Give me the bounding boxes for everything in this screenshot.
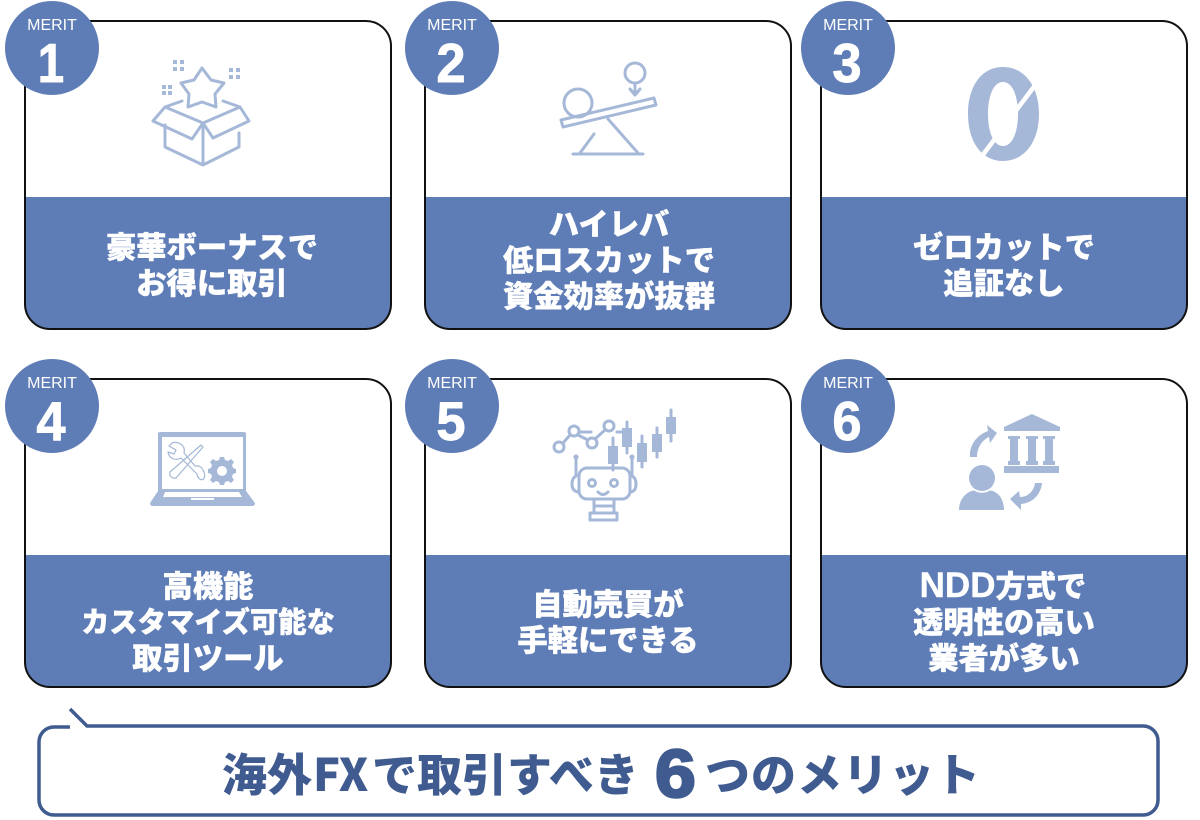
text: merit 2 caption: ハイレバ xyxy=(549,200,669,244)
badge: merit 6: 6 xyxy=(832,391,862,452)
text: merit 4 caption: カスタマイズ可能な xyxy=(81,600,335,641)
title: で取引すべき xyxy=(372,739,639,804)
text: merit 2 caption: 資金効率が抜群 xyxy=(503,272,715,316)
badge: merit 2 xyxy=(405,1,499,95)
callout: title speech box xyxy=(39,709,1158,815)
panel: merit 3 xyxy=(801,1,1187,329)
text: merit 3 caption xyxy=(913,223,1095,303)
text: merit 6 caption: 透明性の高い xyxy=(913,598,1095,642)
panel: merit 1 xyxy=(5,1,391,329)
title xyxy=(222,736,981,811)
badge: merit 4: MERIT xyxy=(27,375,77,392)
text: merit 1 caption: 豪華ボーナスで xyxy=(106,223,318,267)
panel: merit 5 xyxy=(405,359,791,687)
text: merit 4 caption: 取引ツール xyxy=(132,634,284,678)
panel: merit 4 xyxy=(5,359,391,687)
icon: zero xyxy=(968,67,1039,161)
badge: merit 4: 4 xyxy=(36,391,66,452)
badge: merit 3 xyxy=(801,1,895,95)
panel: merit 2 xyxy=(405,1,791,329)
panel: merit 6 xyxy=(801,359,1187,687)
badge: merit 3: 3 xyxy=(832,33,862,94)
badge: merit 5 xyxy=(405,359,499,453)
text: merit 4 caption: 高機能 xyxy=(163,562,253,606)
text: merit 5 caption xyxy=(517,580,699,660)
badge: merit 1 xyxy=(5,1,99,95)
title: 6 xyxy=(655,736,696,811)
badge: merit 6 xyxy=(801,359,895,453)
badge: merit 6: MERIT xyxy=(823,375,873,392)
text: merit 4 caption xyxy=(81,562,335,678)
icon: robot with candlestick chart xyxy=(554,410,676,520)
text: merit 1 caption: お得に取引 xyxy=(136,259,288,303)
badge: merit 4 xyxy=(5,359,99,453)
text: merit 1 caption xyxy=(106,223,318,303)
text: merit 3 caption: ゼロカットで xyxy=(913,223,1095,267)
text: merit 6 caption xyxy=(913,562,1095,678)
icon: seesaw xyxy=(561,63,656,154)
icon: open box with star xyxy=(153,60,249,165)
text: merit 5 caption: 手軽にできる xyxy=(517,616,699,660)
icon: bank and trader with arrows xyxy=(959,414,1060,510)
text: merit 6 caption: 業者が多い xyxy=(928,634,1080,678)
badge: merit 3: MERIT xyxy=(823,17,873,34)
text: merit 6 caption: NDD方式で xyxy=(920,562,1086,606)
badge: merit 1: 1 xyxy=(38,32,64,94)
title: FX xyxy=(313,739,369,804)
badge: merit 5: MERIT xyxy=(427,375,477,392)
badge: merit 1: MERIT xyxy=(27,17,77,34)
icon: laptop with tools xyxy=(150,432,255,506)
text: merit 5 caption: 自動売買が xyxy=(532,580,684,624)
text: merit 2 caption xyxy=(503,200,715,316)
badge: merit 2: 2 xyxy=(436,33,466,94)
text: merit 3 caption: 追証なし xyxy=(943,259,1065,303)
title: つのメリット xyxy=(705,739,981,804)
badge: merit 5: 5 xyxy=(436,391,466,452)
text: merit 2 caption: 低ロスカットで xyxy=(503,236,715,280)
title: 海外 xyxy=(222,739,312,804)
badge: merit 2: MERIT xyxy=(427,17,477,34)
